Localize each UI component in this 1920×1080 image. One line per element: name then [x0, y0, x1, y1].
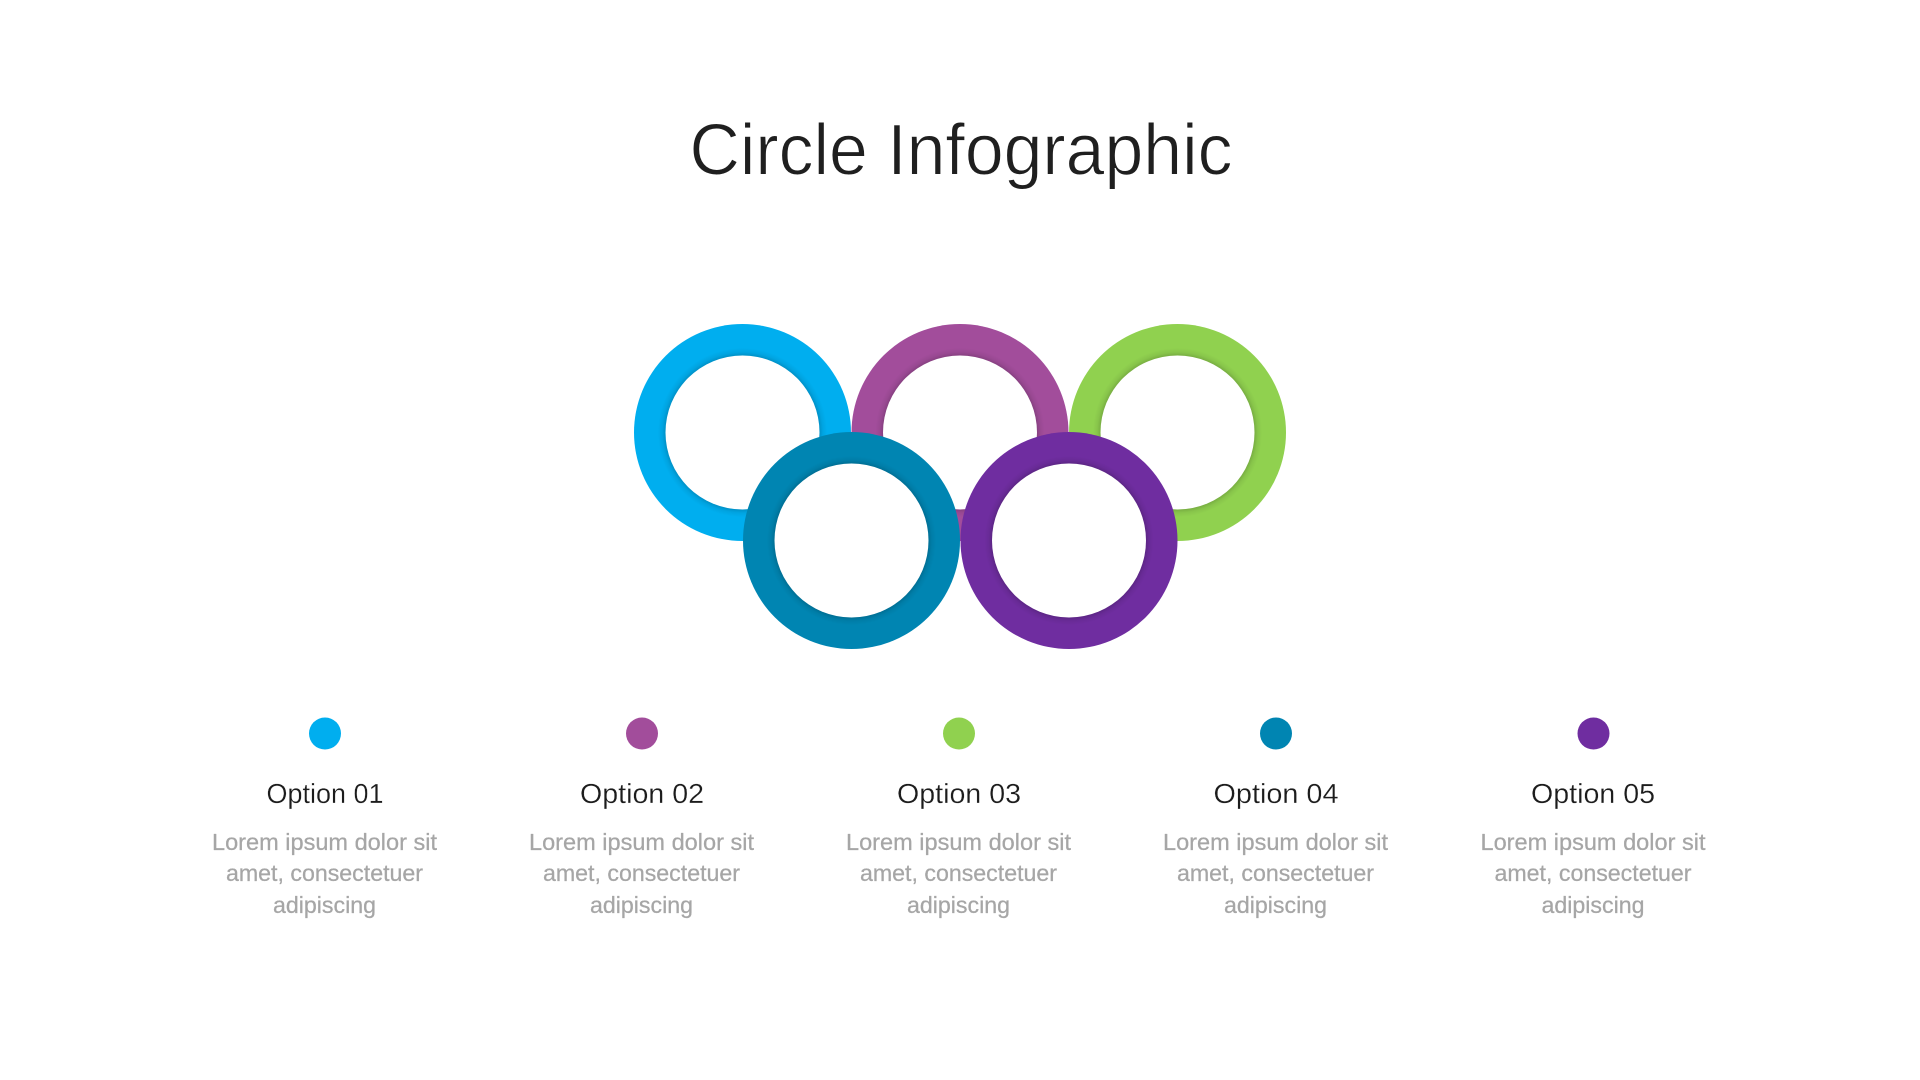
body 05: Lorem ipsum dolor sit — [1480, 829, 1706, 855]
body 01: amet, consectetuer — [226, 860, 423, 886]
ring 1: blue — [634, 324, 851, 541]
option 02 — [529, 718, 755, 918]
heading 02: Option 02 — [580, 778, 704, 809]
option 01 — [212, 718, 438, 918]
heading 03: Option 03 — [897, 778, 1021, 809]
body 04: Lorem ipsum dolor sit — [1163, 829, 1389, 855]
ring 4: teal — [743, 432, 960, 649]
body 01 — [212, 829, 438, 918]
ring 2: magenta — [852, 324, 1068, 541]
ring 5: purple — [960, 432, 1178, 649]
ring 3: green — [1069, 324, 1286, 541]
body 02: amet, consectetuer — [543, 860, 740, 886]
body 05: amet, consectetuer — [1494, 860, 1692, 886]
ring diagram — [634, 324, 1286, 649]
title: Circle Infographic — [690, 110, 1232, 190]
body 01: Lorem ipsum dolor sit — [212, 829, 438, 855]
body 02: adipiscing — [590, 892, 693, 918]
body 01: adipiscing — [273, 892, 376, 918]
body 05 — [1480, 829, 1706, 918]
heading 05: Option 05 — [1531, 778, 1655, 809]
heading 04: Option 04 — [1214, 778, 1338, 809]
body 03: adipiscing — [907, 892, 1010, 918]
body 03: Lorem ipsum dolor sit — [846, 829, 1072, 855]
option 05 — [1480, 718, 1706, 918]
body 04 — [1163, 829, 1389, 918]
body 03 — [846, 829, 1072, 918]
body 02 — [529, 829, 755, 918]
body 04: amet, consectetuer — [1177, 860, 1374, 886]
heading 01: Option 01 — [266, 778, 384, 809]
dot 05 — [1578, 718, 1610, 750]
option 03 — [846, 718, 1072, 918]
dot 03 — [943, 718, 975, 750]
dot 01 — [309, 718, 341, 750]
dot 04 — [1260, 718, 1292, 750]
body 02: Lorem ipsum dolor sit — [529, 829, 755, 855]
body 03: amet, consectetuer — [860, 860, 1057, 886]
body 04: adipiscing — [1224, 892, 1327, 918]
body 05: adipiscing — [1542, 892, 1644, 918]
dot 02 — [626, 718, 658, 750]
option 04 — [1163, 718, 1389, 918]
